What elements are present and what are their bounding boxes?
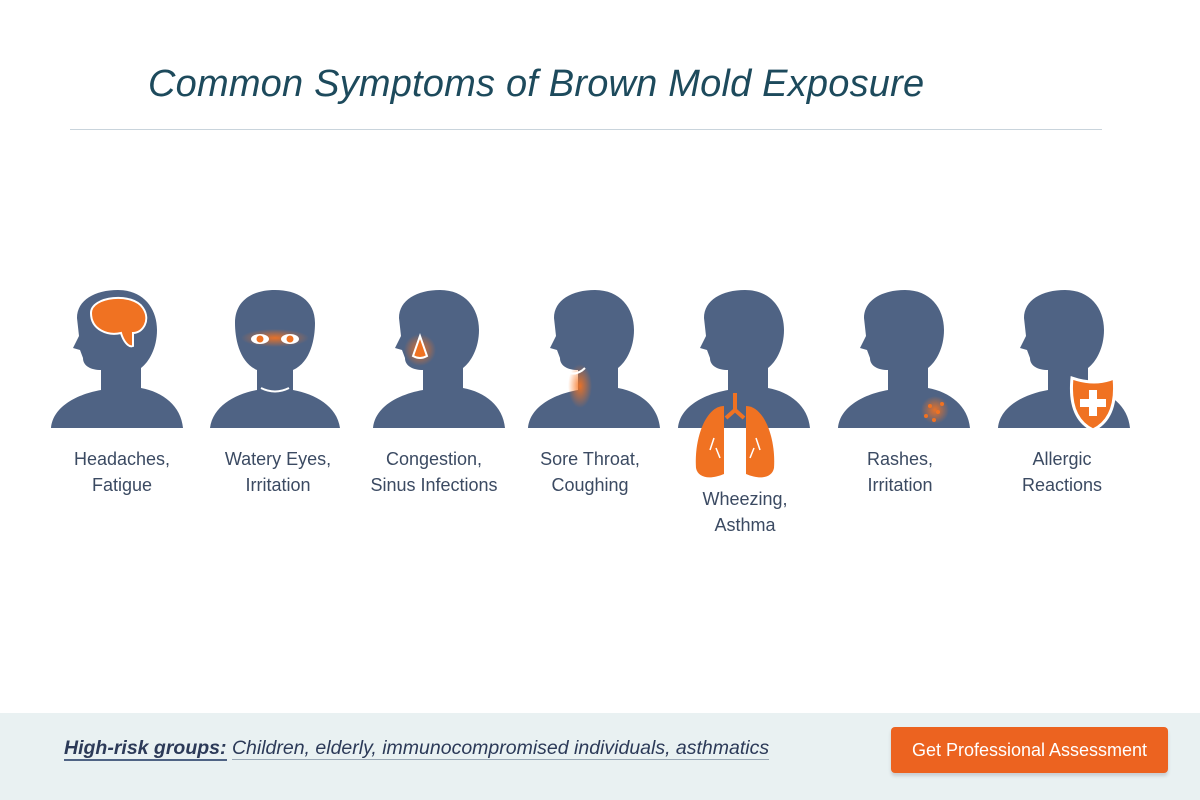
figure: watery eyes xyxy=(210,290,340,428)
labels xyxy=(74,449,170,495)
text: Watery Eyes, xyxy=(225,449,331,469)
figure: congestion xyxy=(373,290,505,428)
high-risk text: High-risk groups: Children, elderly, immunocompromised individuals, asthmatics xyxy=(64,737,769,759)
figure: allergic xyxy=(998,290,1130,430)
figure: rashes xyxy=(838,290,970,428)
text: Coughing xyxy=(551,475,629,495)
text: Rashes, xyxy=(867,449,933,469)
footer band xyxy=(0,713,1200,800)
button xyxy=(891,727,1168,773)
text: Wheezing, xyxy=(702,489,788,509)
text: Sinus Infections xyxy=(370,475,498,495)
figure: sore throat xyxy=(528,290,660,428)
text: Allergic xyxy=(1032,449,1092,469)
figure: wheezing xyxy=(678,290,810,477)
text: Irritation xyxy=(245,475,311,495)
title: Common Symptoms of Brown Mold Exposure xyxy=(148,63,924,105)
button: Get Professional Assessment xyxy=(912,740,1147,760)
labels: Fatigue xyxy=(92,475,152,495)
text: Irritation xyxy=(867,475,933,495)
text: Asthma xyxy=(714,515,776,535)
labels: Headaches, xyxy=(74,449,170,469)
text: Reactions xyxy=(1022,475,1102,495)
text: Sore Throat, xyxy=(540,449,640,469)
figure: headaches xyxy=(51,290,183,428)
text: Congestion, xyxy=(386,449,482,469)
